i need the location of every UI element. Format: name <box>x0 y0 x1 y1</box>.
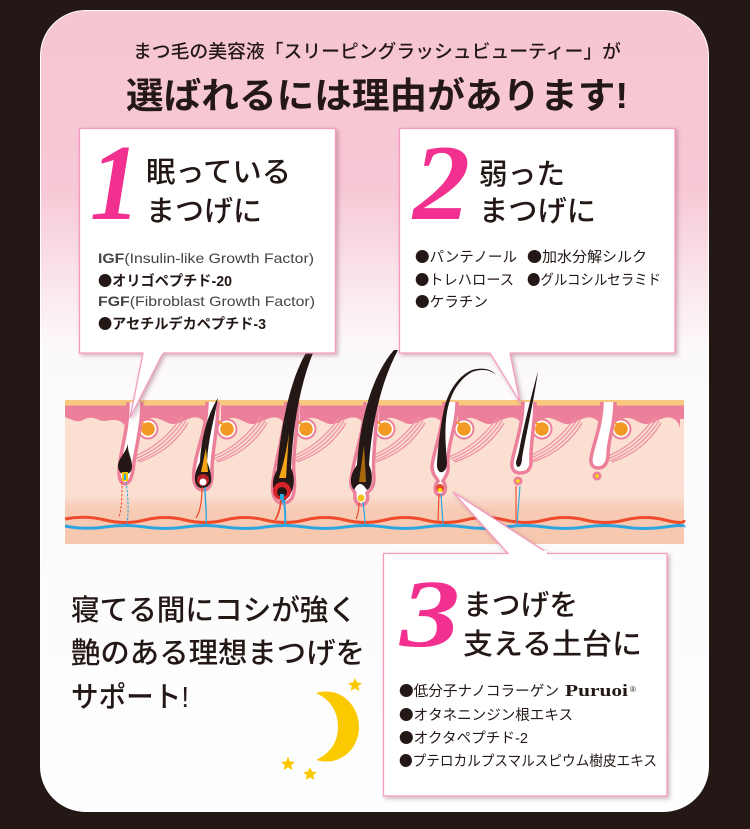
skin cross-section diagram <box>65 350 684 544</box>
follicle 4 <box>351 350 398 524</box>
callout 2 box with pointer <box>400 128 675 402</box>
follicle 3 <box>273 353 313 525</box>
follicle 2 <box>194 398 218 524</box>
tagline text: 艶のある理想まつげを <box>71 637 365 670</box>
callout 3: 支える土台に <box>463 628 642 661</box>
tagline text: 寝てる間にコシが強く <box>71 594 357 627</box>
callout 3 heading: まつげを <box>463 589 578 622</box>
callout 3 ingredients: ●オタネニンジン根エキス <box>399 704 573 725</box>
callout 1 ingredients <box>98 250 315 334</box>
callout 3 ingredients: Puruoi <box>565 681 628 700</box>
follicle 1 <box>118 402 142 524</box>
tagline text <box>71 594 365 714</box>
icon: crescent moon and stars <box>281 678 362 780</box>
callout 3 ingredients <box>399 680 657 771</box>
callout 2 ingredients: ●ケラチン <box>415 291 488 312</box>
callout 3 box with pointer <box>384 492 667 796</box>
blood vessels <box>65 517 684 522</box>
callout 1: まつげに <box>146 195 262 228</box>
skin base <box>65 400 684 544</box>
callout 2 <box>400 124 675 402</box>
callout 1 box with pointer <box>80 128 336 418</box>
follicle 7 <box>591 402 615 480</box>
callout 3 ingredients: ® <box>630 685 636 694</box>
callout 1 ingredients: IGF(Insulin-like Growth Factor) <box>98 250 314 266</box>
follicle 6 <box>512 371 538 525</box>
callout 1 ingredients: FGF (Fibroblast Growth Factor) <box>98 293 315 309</box>
follicle 5 <box>432 369 496 524</box>
tagline text: サポート! <box>71 681 189 714</box>
heading: intro line: まつ毛の美容液「スリーピングラッシュビューティー」が <box>133 41 621 62</box>
callout 3 ingredients: ●低分子ナノコラーゲン <box>399 680 559 701</box>
callout 2 ingredients: ●加水分解シルク <box>527 246 647 267</box>
number 3: 3 <box>399 560 460 667</box>
callout 1 heading: 眠っている <box>146 157 291 189</box>
callout 2 ingredients: ●グルコシルセラミド <box>527 269 661 290</box>
callout 3 ingredients: ●オクタペプチド-2 <box>399 727 528 748</box>
heading: main title: 選ばれるには理由があります! <box>126 75 628 116</box>
callout 1 ingredients: ●アセチルデカペプチド-3 <box>98 313 266 334</box>
number 1: 1 <box>90 124 140 243</box>
callout 1 ingredients: ●オリゴペプチド-20 <box>98 270 232 291</box>
callout 3 ingredients: ●プテロカルプスマルスピウム樹皮エキス <box>399 750 657 771</box>
top skin layer <box>65 405 130 434</box>
callout 2 ingredients: ●パンテノール <box>415 246 517 267</box>
callout 2: まつげに <box>479 195 596 228</box>
callout 3 <box>384 492 667 796</box>
callout 2 ingredients <box>415 246 661 312</box>
callout 1 <box>80 124 336 418</box>
callout 2 heading: 弱った <box>479 159 565 191</box>
callout 2 ingredients: ●トレハロース <box>415 269 514 290</box>
number 2: 2 <box>411 124 470 243</box>
